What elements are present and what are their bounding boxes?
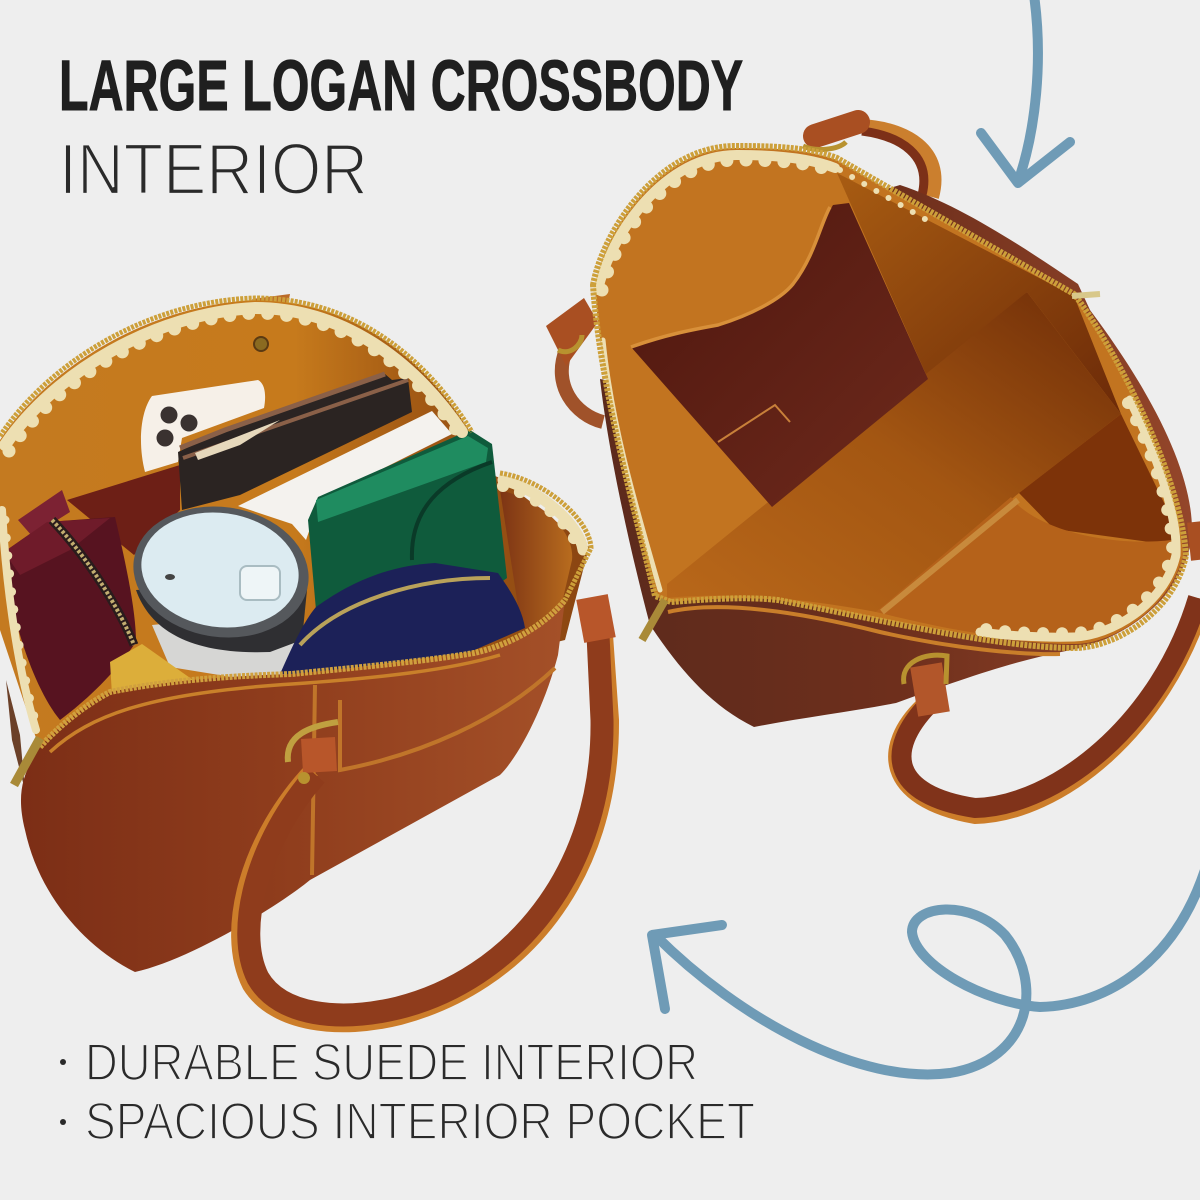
left bag right suede side	[500, 490, 572, 632]
left bag top zipper	[0, 298, 591, 600]
bullet dots	[60, 1059, 66, 1125]
right bag exterior leather	[600, 185, 1192, 727]
right bag zipper pulls	[642, 294, 1100, 640]
right bag suede interior	[595, 148, 1183, 644]
right bag suede floor	[667, 292, 1121, 612]
bullet list	[60, 1034, 755, 1151]
dark wallet	[178, 374, 412, 510]
right bag left handle	[546, 298, 603, 422]
navy scalloped pouch	[280, 563, 525, 675]
right bag bottom handle	[895, 522, 1200, 817]
burgundy pouch	[4, 490, 136, 720]
right bag interior zip pocket	[876, 497, 1172, 640]
right bag shaded back wall	[837, 173, 1121, 414]
arrow: top blue arrow	[981, 0, 1070, 183]
right bag dark far corner	[1019, 414, 1172, 545]
bag: right open bag	[546, 122, 1200, 817]
white book	[238, 411, 452, 540]
left bag front pocket	[312, 668, 555, 875]
left bag front piping	[50, 655, 500, 752]
burgundy back panel	[67, 465, 180, 555]
left bag front leather	[21, 600, 565, 972]
arrow: looping blue arrow	[652, 870, 1200, 1074]
left bag handle	[239, 597, 611, 1024]
yellow packet	[110, 644, 193, 695]
left bag front zipper	[40, 600, 565, 747]
left bag right scalloped lining	[503, 480, 583, 551]
right bag scalloped lining	[598, 155, 1176, 637]
right bag top handle	[803, 122, 934, 197]
left bag exterior sliver	[6, 680, 25, 790]
bullet: pocket: SPACIOUS INTERIOR POCKET	[85, 1093, 755, 1151]
right bag front piping	[668, 607, 1060, 654]
right bag brass zipper	[593, 146, 1186, 648]
left bag top scalloped lining	[2, 308, 462, 730]
travel cup	[125, 495, 317, 680]
subtitle: INTERIOR	[59, 130, 368, 210]
left bag suede interior	[0, 300, 589, 750]
left bag zipper pull	[14, 738, 40, 785]
phone	[141, 380, 265, 472]
title: LARGE LOGAN CROSSBODY	[59, 46, 743, 125]
bullet: suede: DURABLE SUEDE INTERIOR	[85, 1034, 698, 1092]
left bag rivet	[254, 337, 268, 351]
bag: left filled bag	[0, 294, 611, 1024]
green wallet	[308, 430, 507, 610]
right bag inner pocket	[631, 203, 928, 507]
left bag back tab	[252, 294, 290, 304]
